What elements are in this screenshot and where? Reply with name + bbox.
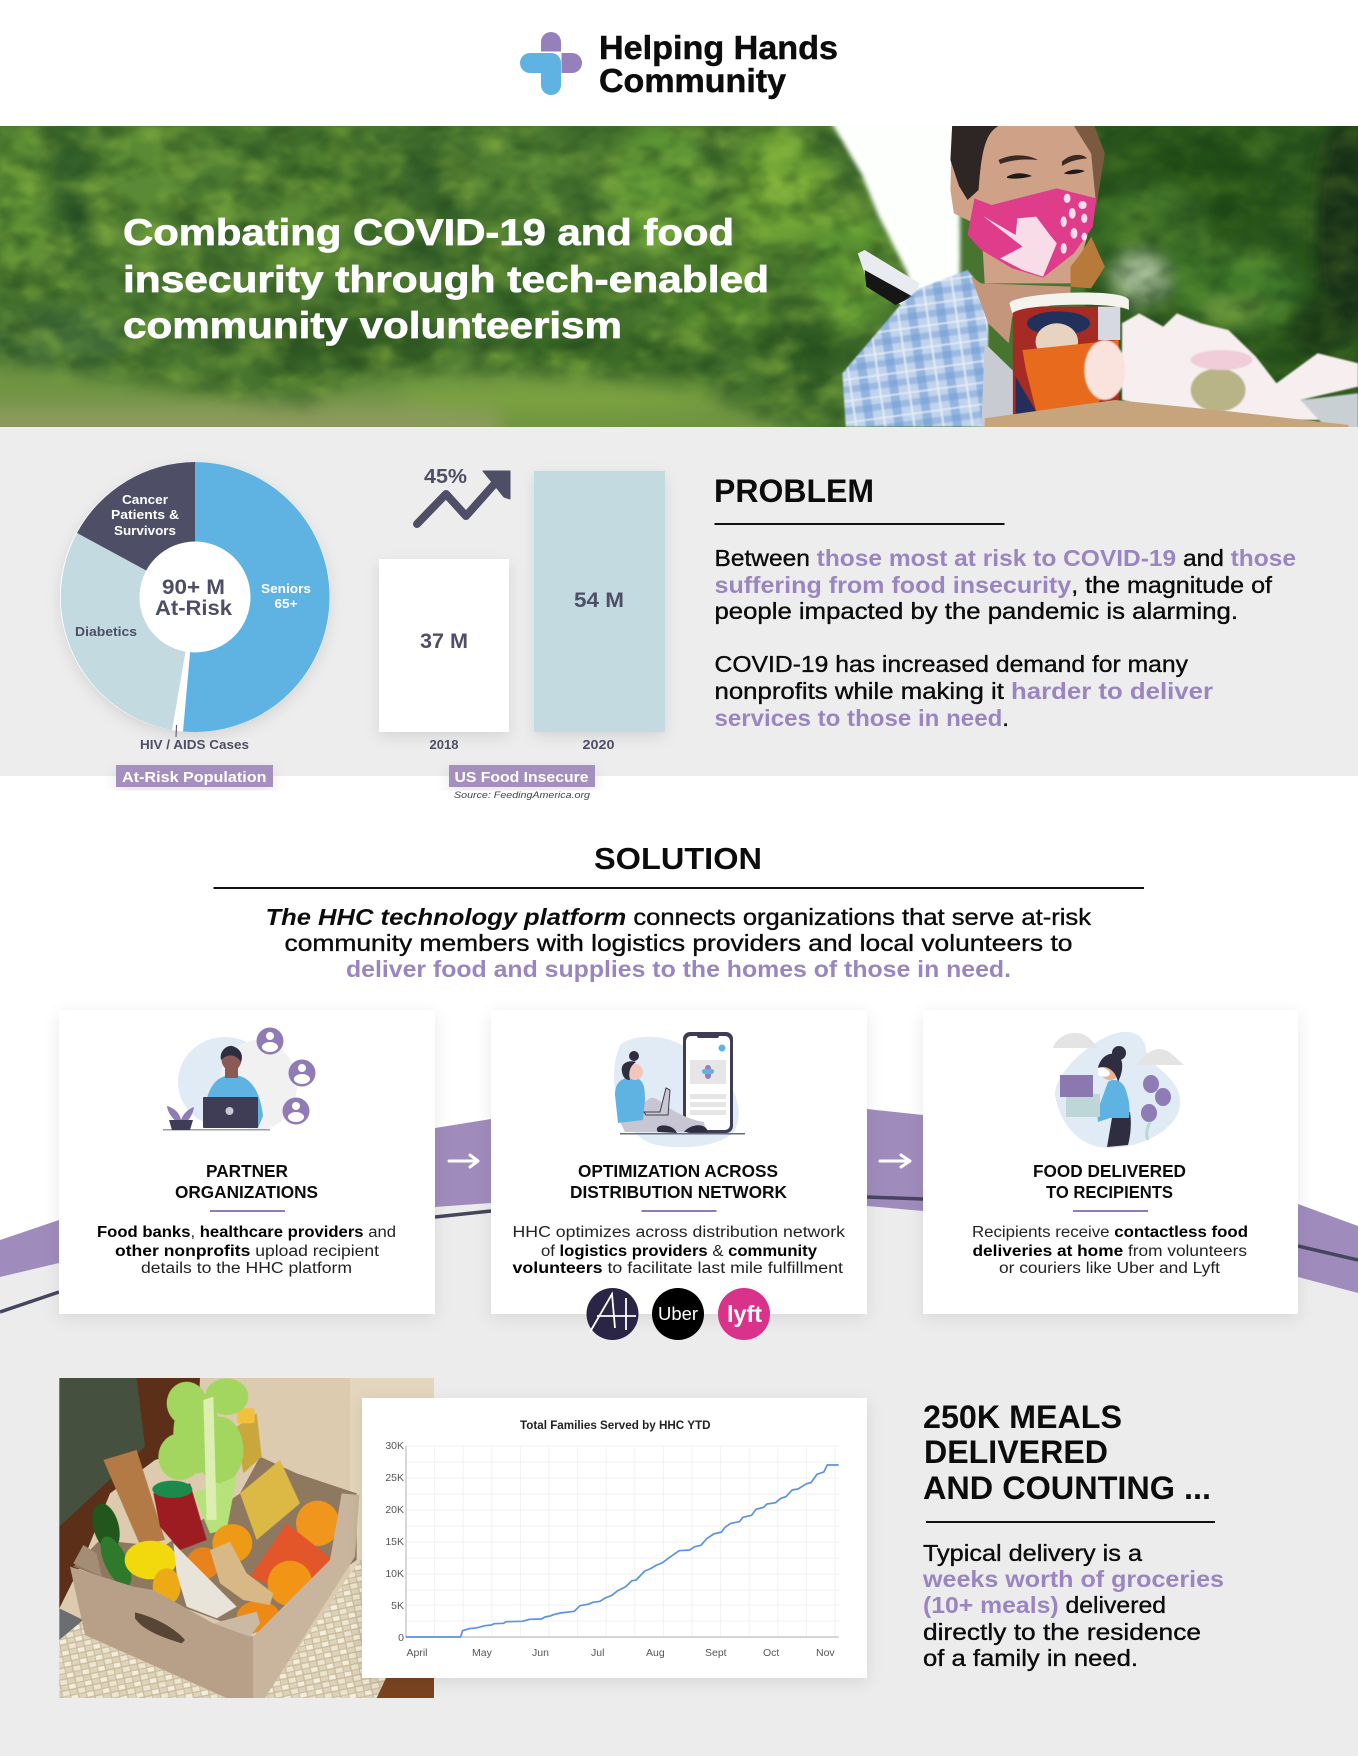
panel: partner organizations xyxy=(59,1010,435,1314)
banner headline: Combating COVID-19 and food xyxy=(123,212,734,253)
grid xyxy=(406,1446,839,1637)
axes xyxy=(406,1446,839,1637)
diabetics slice xyxy=(61,533,195,730)
box interior xyxy=(73,1457,357,1633)
source note: Source: FeedingAmerica.org xyxy=(454,790,591,801)
pie labels: Patients & xyxy=(111,507,179,522)
pie chart: at-risk population xyxy=(60,462,330,752)
pie labels xyxy=(75,492,311,752)
shirt xyxy=(842,270,988,427)
right trees xyxy=(1085,120,1358,435)
y axis labels: 30K xyxy=(385,1440,404,1452)
bar 2020 xyxy=(534,471,665,732)
card title: FOOD DELIVERED xyxy=(1033,1161,1186,1181)
logo wordmark xyxy=(599,29,838,99)
tag: US food insecure xyxy=(449,765,595,787)
logo: Lyft: lyft xyxy=(727,1301,762,1327)
y axis labels: 15K xyxy=(385,1536,404,1548)
seniors slice xyxy=(183,462,330,732)
solution text: The HHC technology platform connects organizations that serve at-risk xyxy=(266,904,1092,930)
problem text: services to those in need . xyxy=(714,705,1009,731)
mask xyxy=(968,188,1096,278)
card body xyxy=(512,1224,845,1277)
line chart: total families served xyxy=(362,1398,867,1678)
head xyxy=(950,126,1098,283)
card body: volunteers to facilitate last mile fulfillment xyxy=(512,1260,844,1277)
card title xyxy=(175,1161,318,1212)
results heading: 250K MEALS xyxy=(923,1399,1122,1435)
card title: OPTIMIZATION ACROSS xyxy=(578,1161,778,1181)
icon: person at laptop xyxy=(163,1028,316,1130)
banner headline: community volunteerism xyxy=(123,305,622,346)
panel: lower grey background xyxy=(0,1203,1358,1756)
bag behind xyxy=(858,250,920,307)
card title: DISTRIBUTION NETWORK xyxy=(570,1182,787,1202)
y axis labels: 20K xyxy=(385,1504,404,1516)
logo: Lyft xyxy=(718,1288,770,1340)
oats can xyxy=(1013,307,1119,417)
logo xyxy=(520,29,838,99)
card title: ORGANIZATIONS xyxy=(175,1182,318,1202)
results text xyxy=(922,1540,1224,1671)
centre hole xyxy=(140,542,250,652)
bar chart: US food insecure xyxy=(379,466,665,752)
pie labels: Seniors xyxy=(261,581,311,596)
arrow: network to recipients xyxy=(880,1155,910,1167)
pie labels: HIV / AIDS Cases xyxy=(140,737,249,752)
card title xyxy=(570,1161,787,1212)
problem text: Between those most at risk to COVID-19 and those xyxy=(714,545,1296,571)
icon: person with phone xyxy=(614,1032,745,1147)
bar values xyxy=(420,466,624,752)
x axis labels xyxy=(406,1647,835,1659)
tag: at-risk population: At-Risk Population xyxy=(122,770,266,786)
x axis labels: Nov xyxy=(816,1647,835,1659)
tag: at-risk population xyxy=(116,765,273,787)
banner headline xyxy=(123,212,769,346)
bar values: 54 M xyxy=(574,589,624,612)
logo: Uber: Uber xyxy=(658,1304,698,1324)
pie labels: Cancer xyxy=(122,492,168,507)
tag: US food insecure: US Food Insecure xyxy=(454,770,588,786)
card body: of logistics providers & community xyxy=(541,1243,817,1260)
card body: details to the HHC platform xyxy=(141,1260,352,1277)
card body: or couriers like Uber and Lyft xyxy=(999,1260,1221,1277)
leaf texture: left trees xyxy=(0,126,960,427)
box faces xyxy=(70,1567,253,1698)
panel: problem background xyxy=(0,427,1358,776)
card body xyxy=(972,1224,1248,1277)
bar values: 45% xyxy=(424,466,467,488)
bags xyxy=(1084,313,1358,430)
contents xyxy=(88,1378,339,1633)
problem text: people impacted by the pandemic is alarming. xyxy=(714,598,1238,624)
contact icons xyxy=(256,1028,316,1124)
logo wordmark: Helping Hands xyxy=(599,29,838,66)
solution text: deliver food and supplies to the homes of those in need. xyxy=(346,956,1011,982)
hero banner xyxy=(0,126,1358,427)
results text: of a family in need. xyxy=(923,1645,1138,1671)
grass xyxy=(0,357,798,427)
icon: rising arrow xyxy=(417,471,510,524)
y axis labels: 10K xyxy=(385,1568,404,1580)
results heading xyxy=(923,1399,1215,1523)
chart title: Total Families Served by HHC YTD xyxy=(520,1420,710,1432)
panel: optimization across distribution network xyxy=(491,1010,867,1340)
cancer slice xyxy=(77,462,195,597)
card body: HHC optimizes across distribution network xyxy=(512,1224,845,1241)
data line xyxy=(406,1465,839,1637)
y axis labels xyxy=(385,1440,404,1644)
results text: directly to the residence xyxy=(923,1619,1201,1645)
problem text: suffering from food insecurity , the magnitude of xyxy=(714,572,1273,598)
y axis labels: 0 xyxy=(398,1632,404,1644)
panel: food delivered to recipients xyxy=(923,1010,1298,1314)
card body: other nonprofits upload recipient xyxy=(115,1243,380,1260)
x axis labels: May xyxy=(472,1647,493,1659)
logo wordmark: Community xyxy=(599,62,787,99)
icon: cross xyxy=(520,32,582,95)
bar values: 2018 xyxy=(430,737,458,752)
flow ribbon xyxy=(0,1109,1358,1312)
x axis labels: Aug xyxy=(646,1647,665,1659)
card body: Recipients receive contactless food xyxy=(972,1224,1248,1241)
solution heading: SOLUTION xyxy=(594,841,762,876)
x axis labels: Jul xyxy=(591,1647,604,1659)
results heading: DELIVERED xyxy=(924,1434,1108,1470)
banner headline: insecurity through tech-enabled xyxy=(123,259,769,300)
pie labels: Survivors xyxy=(114,523,176,538)
logo: A+ courier xyxy=(586,1288,638,1340)
x axis labels: Oct xyxy=(763,1647,779,1659)
bar values: 37 M xyxy=(420,630,468,653)
card title xyxy=(1033,1161,1186,1212)
bar 2018 xyxy=(379,559,509,732)
card body xyxy=(97,1224,396,1277)
x axis labels: April xyxy=(406,1647,428,1659)
problem text: COVID-19 has increased demand for many xyxy=(714,651,1189,677)
results text: (10+ meals) delivered xyxy=(923,1592,1166,1618)
results text: Typical delivery is a xyxy=(923,1540,1142,1566)
y axis labels: 25K xyxy=(385,1472,404,1484)
y axis labels: 5K xyxy=(391,1600,404,1612)
x axis labels: Jun xyxy=(532,1647,549,1659)
pie labels: Diabetics xyxy=(75,624,137,639)
card body: Food banks , healthcare providers and xyxy=(97,1224,396,1241)
solution text: community members with logistics providers and local volunteers to xyxy=(284,930,1072,956)
icon: woman carrying boxes xyxy=(1053,1032,1184,1148)
logo: Uber xyxy=(652,1288,704,1340)
pie labels: 90+ M xyxy=(162,576,225,599)
results heading: AND COUNTING ... xyxy=(923,1470,1211,1506)
photo: box of groceries xyxy=(59,1378,434,1698)
card title: TO RECIPIENTS xyxy=(1046,1182,1173,1202)
arrow: partners to network xyxy=(449,1155,478,1167)
pie labels: 65+ xyxy=(274,596,298,611)
problem text xyxy=(714,545,1296,731)
results text: weeks worth of groceries xyxy=(922,1566,1224,1592)
banner photo: trees, grass, volunteer xyxy=(0,126,1358,427)
sky xyxy=(830,120,960,300)
bar values: 2020 xyxy=(582,737,614,752)
pie labels: At-Risk xyxy=(155,597,232,620)
solution text xyxy=(266,904,1092,982)
x axis labels: Sept xyxy=(705,1647,727,1659)
card body: deliveries at home from volunteers xyxy=(972,1243,1247,1260)
problem heading: PROBLEM xyxy=(714,473,874,509)
problem text: nonprofits while making it harder to deliver xyxy=(714,678,1213,704)
card title: PARTNER xyxy=(206,1161,288,1181)
seated woman xyxy=(620,1098,706,1132)
